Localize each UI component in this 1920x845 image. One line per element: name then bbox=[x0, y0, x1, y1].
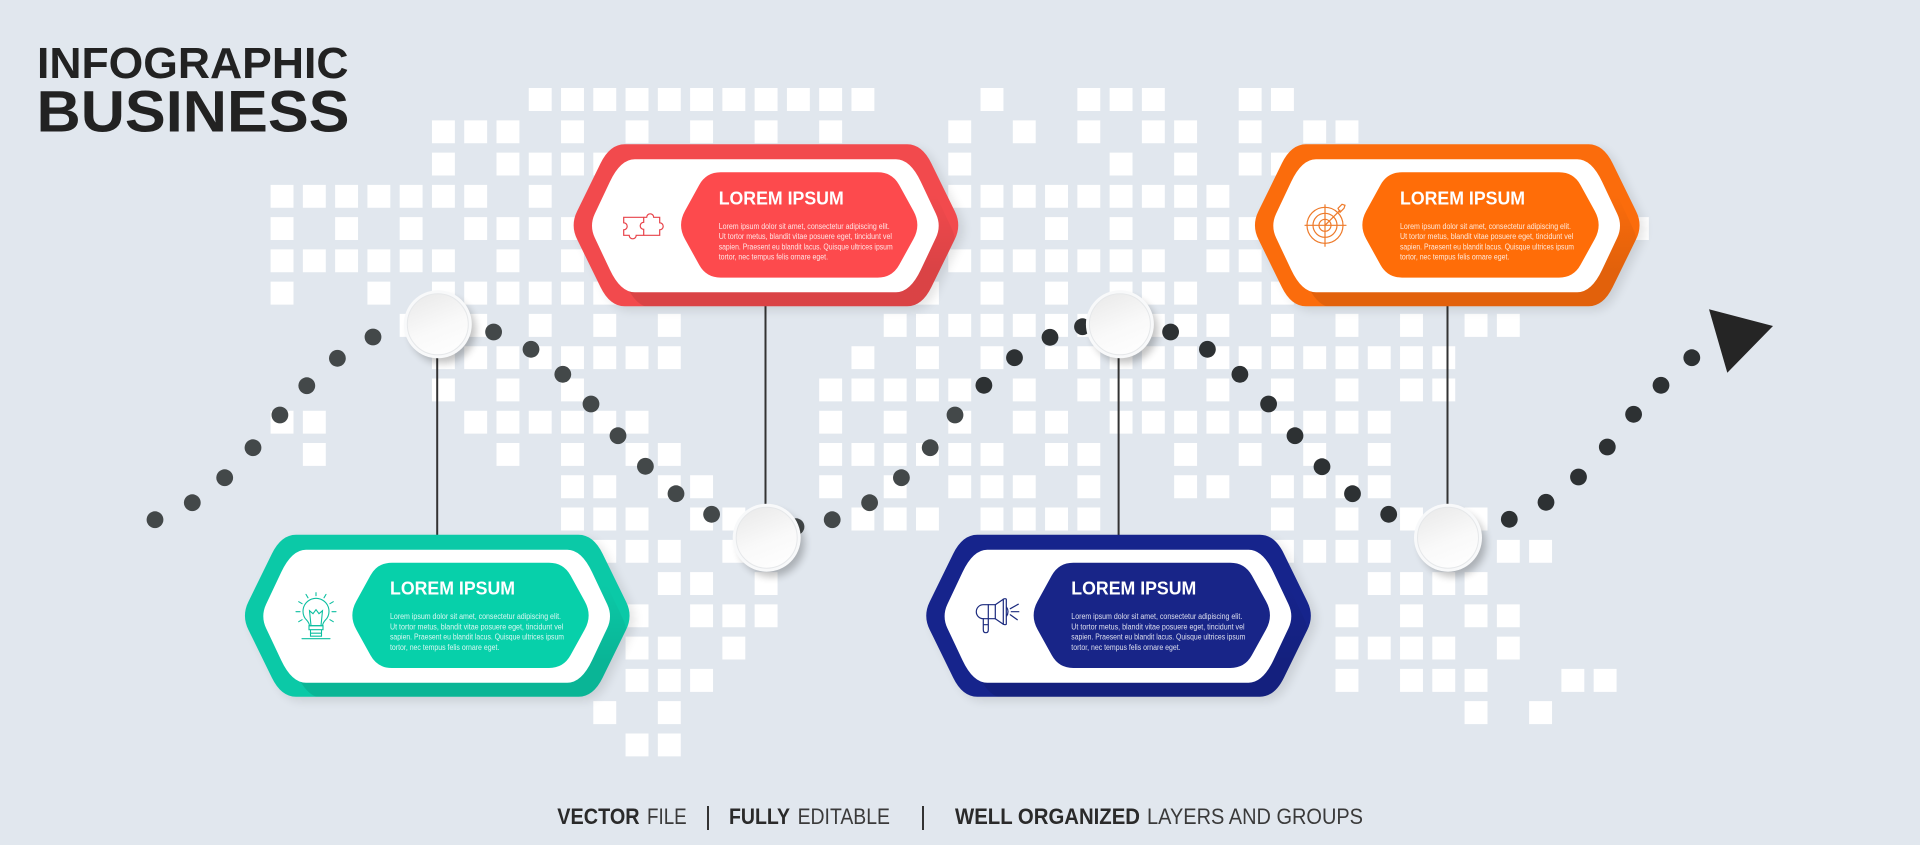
panel: orange card bbox=[1255, 144, 1645, 310]
card body text bbox=[719, 222, 893, 262]
background pixel world map bbox=[271, 100, 1649, 745]
card body text: sapien. Praesent eu blandit lacus. Quisque ultrices ipsum bbox=[1071, 633, 1246, 642]
title line: infographic: INFOGRAPHIC bbox=[37, 39, 348, 88]
card body text bbox=[1400, 222, 1574, 262]
icon: megaphone bbox=[976, 599, 1019, 633]
node circle 3 bbox=[1086, 290, 1158, 363]
card body text bbox=[390, 612, 564, 652]
panel: red card bbox=[574, 144, 963, 310]
connector stems bbox=[437, 305, 1448, 536]
card body text: Lorem ipsum dolor sit amet, consectetur adipiscing elit. bbox=[1400, 222, 1571, 231]
card body text: Ut tortor metus, blandit vitae posuere eget, tincidunt vel bbox=[390, 623, 563, 632]
footer caption: EDITABLE bbox=[798, 804, 890, 829]
panel: navy card bbox=[926, 535, 1316, 701]
card body text: tortor, nec tempus felis ornare eget. bbox=[719, 253, 828, 262]
icon: light bulb bbox=[296, 593, 336, 639]
card heading: LOREM IPSUM bbox=[1071, 578, 1196, 599]
footer caption: LAYERS AND GROUPS bbox=[1147, 804, 1363, 829]
title bbox=[36, 39, 350, 144]
card body text: Lorem ipsum dolor sit amet, consectetur adipiscing elit. bbox=[390, 612, 561, 621]
card body text: tortor, nec tempus felis ornare eget. bbox=[1071, 643, 1181, 652]
card heading: LOREM IPSUM bbox=[719, 187, 844, 208]
icon: puzzle bbox=[624, 214, 663, 239]
card body text: Lorem ipsum dolor sit amet, consectetur adipiscing elit. bbox=[719, 222, 890, 231]
card body text: Ut tortor metus, blandit vitae posuere eget, tincidunt vel bbox=[719, 232, 892, 241]
card body text: sapien. Praesent eu blandit lacus. Quisque ultrices ipsum bbox=[719, 242, 893, 251]
card body text: tortor, nec tempus felis ornare eget. bbox=[390, 643, 499, 652]
node circle 4 bbox=[1414, 504, 1486, 577]
title line: business: BUSINESS bbox=[36, 80, 350, 144]
node circle 2 bbox=[733, 504, 805, 577]
card body text: Ut tortor metus, blandit vitae posuere eget, tincidunt vel bbox=[1071, 623, 1245, 632]
footer caption bbox=[557, 804, 1363, 830]
node circle 1 bbox=[404, 290, 476, 363]
footer caption: FULLY bbox=[729, 804, 790, 829]
card body text: tortor, nec tempus felis ornare eget. bbox=[1400, 253, 1509, 262]
footer caption: VECTOR bbox=[557, 804, 640, 829]
footer caption: WELL ORGANIZED bbox=[955, 804, 1140, 829]
dotted trend line bbox=[147, 318, 1700, 535]
card body text: Lorem ipsum dolor sit amet, consectetur adipiscing elit. bbox=[1071, 612, 1242, 621]
icon: target with arrow bbox=[1305, 204, 1346, 246]
arrow head bbox=[1709, 309, 1773, 373]
card heading: LOREM IPSUM bbox=[390, 578, 515, 599]
card body text bbox=[1071, 612, 1246, 652]
panel: teal card bbox=[245, 535, 635, 701]
card body text: sapien. Praesent eu blandit lacus. Quisque ultrices ipsum bbox=[390, 633, 564, 642]
card body text: Ut tortor metus, blandit vitae posuere eget, tincidunt vel bbox=[1400, 232, 1573, 241]
card body text: sapien. Praesent eu blandit lacus. Quisque ultrices ipsum bbox=[1400, 242, 1574, 251]
card heading: LOREM IPSUM bbox=[1400, 187, 1525, 208]
footer caption: FILE bbox=[647, 804, 687, 829]
